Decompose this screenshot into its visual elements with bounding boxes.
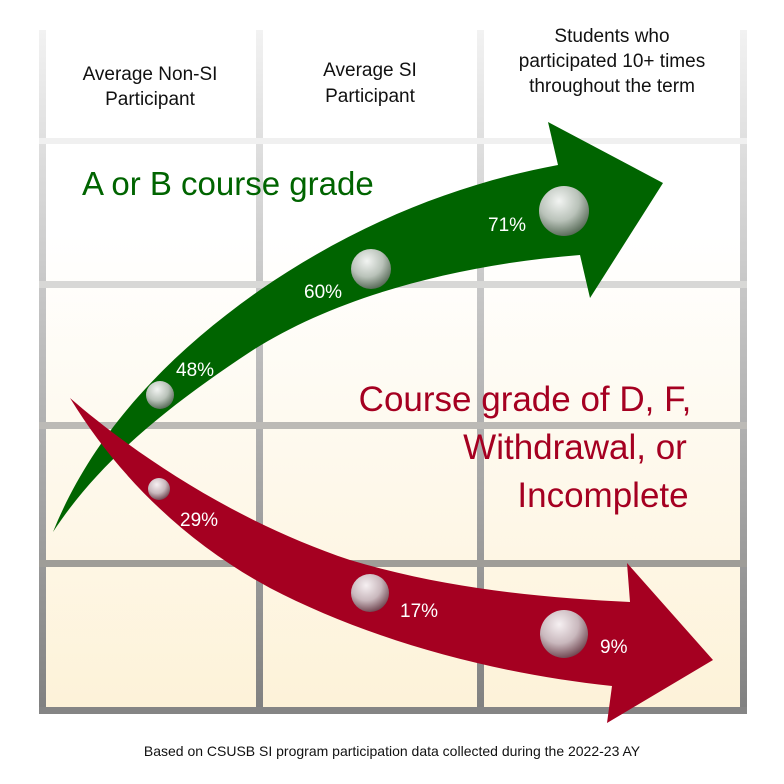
column header: Students who participated 10+ times: throughout the term bbox=[529, 76, 695, 97]
label: D F W I: Incomplete bbox=[517, 476, 689, 515]
label: A or B course grade: A or B course grade bbox=[82, 165, 374, 202]
column header: Students who participated 10+ times: Students who bbox=[554, 26, 670, 47]
column header: Average SI Participant: Average SI bbox=[323, 60, 417, 81]
column header: Average SI Participant: Participant bbox=[325, 86, 416, 107]
green arrow: A or B: 48% bbox=[176, 360, 214, 381]
red arrow: DFW bbox=[70, 398, 713, 723]
green arrow: A or B bbox=[53, 122, 663, 532]
column header: Students who participated 10+ times: participated 10+ times bbox=[519, 51, 705, 72]
column header: Average Non-SI Participant: Average Non-SI bbox=[83, 64, 217, 85]
green arrow: A or B: 71% bbox=[488, 215, 526, 236]
label: D F W I: Withdrawal, or bbox=[463, 428, 687, 467]
red arrow: DFW: 9% bbox=[600, 637, 628, 658]
label: D F W I: Course grade of D, F, bbox=[359, 380, 691, 419]
green arrow: A or B: 60% bbox=[304, 282, 342, 303]
red arrow: DFW: 17% bbox=[400, 601, 438, 622]
column header: Average Non-SI Participant: Participant bbox=[105, 89, 196, 110]
red arrow: DFW: 29% bbox=[180, 510, 218, 531]
grid background bbox=[39, 30, 747, 714]
footnote: Based on CSUSB SI program participation data collected during the 2022-23 AY bbox=[144, 743, 641, 759]
